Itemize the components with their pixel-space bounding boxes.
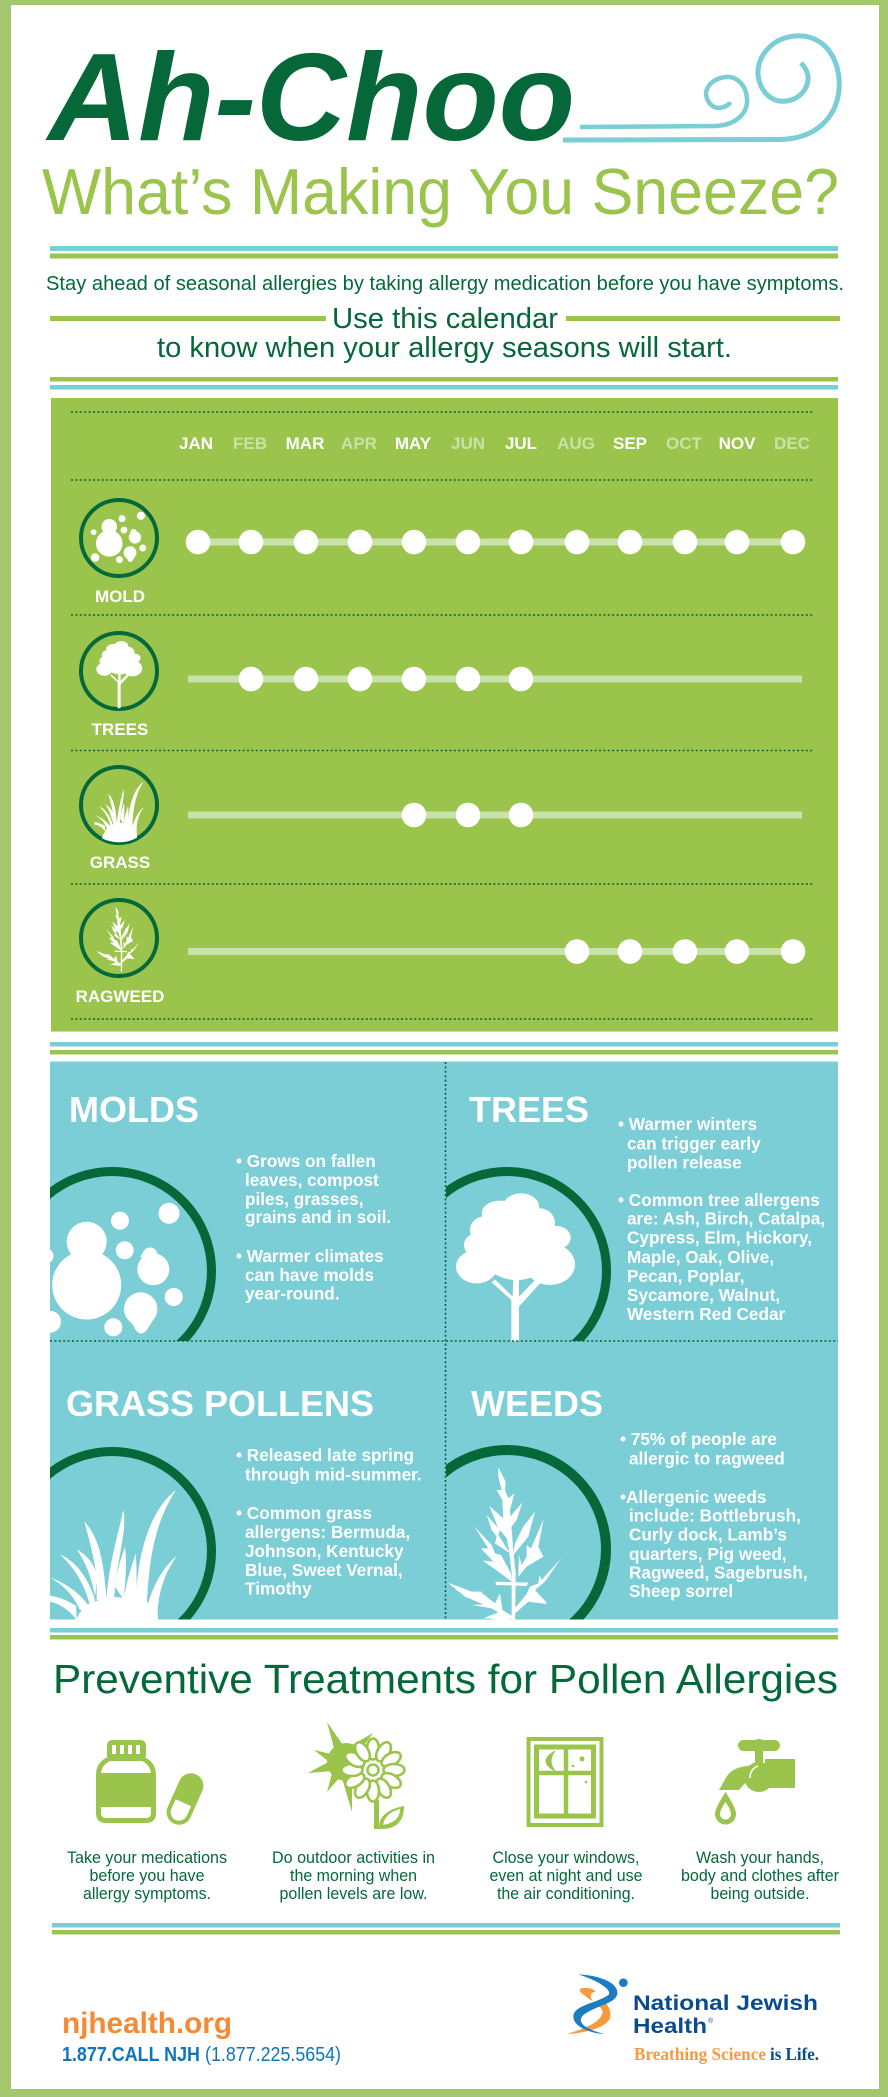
section: grass pollens — [50, 1390, 420, 1620]
section: weeds: Sheep sorrel — [629, 1581, 733, 1601]
calendar month headers: OCT — [666, 434, 703, 453]
treatment: close windows: the air conditioning. — [497, 1885, 635, 1903]
row: ragweed: RAGWEED — [76, 987, 164, 1006]
section: trees: can trigger early — [627, 1134, 761, 1154]
section: trees: are: Ash, Birch, Catalpa, — [627, 1208, 825, 1228]
section: molds: • Grows on fallen — [236, 1151, 376, 1171]
row: mold — [81, 500, 805, 606]
title: Ah-Choo: Ah-Choo — [45, 29, 575, 167]
section: grass pollens: Johnson, Kentucky — [245, 1541, 404, 1561]
footer contact: (1.877.225.5654) — [205, 2044, 341, 2066]
section: trees: pollen release — [627, 1152, 742, 1172]
panel: allergen details — [12, 1062, 838, 1653]
calendar month headers: DEC — [774, 434, 810, 453]
logo: National Jewish Health: Breathing Science — [634, 2044, 766, 2064]
logo: National Jewish Health: ® — [708, 2017, 714, 2025]
section: trees: Sycamore, Walnut, — [627, 1285, 780, 1305]
divider rules below calendar — [50, 1042, 838, 1054]
section: trees: • Common tree allergens — [618, 1190, 820, 1210]
treatment: medications: before you have — [90, 1867, 204, 1885]
treatment: wash hands — [681, 1739, 839, 1903]
section: grass pollens: • Common grass — [236, 1503, 372, 1523]
logo: National Jewish Health: Health — [633, 2015, 707, 2038]
section: molds: can have molds — [245, 1265, 374, 1285]
row: trees — [81, 633, 802, 739]
section: molds: year-round. — [245, 1284, 340, 1304]
icon: sneeze wind swirl — [563, 36, 839, 140]
calendar month headers: APR — [341, 434, 377, 453]
divider rules above calendar — [50, 377, 838, 390]
treatment: outdoor activities: pollen levels are low. — [280, 1885, 428, 1903]
calendar month headers: FEB — [233, 434, 267, 453]
icon: pill bottle and capsule — [96, 1740, 207, 1829]
treatment: medications — [67, 1740, 227, 1903]
treatment: medications: Take your medications — [67, 1849, 227, 1867]
section: grass pollens: GRASS POLLENS — [66, 1383, 374, 1424]
section: weeds: WEEDS — [471, 1383, 603, 1424]
treatment: wash hands: Wash your hands, — [696, 1849, 824, 1867]
calendar instruction: Use this calendar — [332, 303, 559, 335]
row: trees: TREES — [92, 720, 148, 739]
divider rules above footer — [52, 1923, 840, 1934]
footer contact: 1.877.CALL NJH — [62, 2044, 200, 2066]
treatment: wash hands: body and clothes after — [681, 1867, 839, 1885]
section: molds: leaves, compost — [245, 1170, 379, 1190]
section: weeds: Curly dock, Lamb’s — [629, 1524, 787, 1544]
section: trees: • Warmer winters — [618, 1114, 757, 1134]
calendar month headers: NOV — [719, 434, 756, 453]
section: weeds: Ragweed, Sagebrush, — [629, 1562, 808, 1582]
icon: sun and flower — [308, 1722, 404, 1829]
section: weeds: include: Bottlebrush, — [629, 1506, 801, 1526]
divider rules below details — [50, 1628, 838, 1640]
section: molds: MOLDS — [69, 1089, 199, 1130]
section: weeds: allergic to ragweed — [629, 1448, 785, 1468]
logo: National Jewish Health — [567, 1974, 819, 2064]
treatment: close windows — [490, 1739, 642, 1903]
footer contact — [62, 2007, 341, 2066]
section: weeds: • 75% of people are — [620, 1429, 777, 1449]
section: trees: TREES — [469, 1089, 589, 1130]
icon: DNA figure — [567, 1974, 628, 2034]
section: molds — [50, 1096, 390, 1341]
calendar month headers: JUL — [505, 434, 537, 453]
calendar month headers: JAN — [179, 434, 213, 453]
section: molds: grains and in soil. — [245, 1207, 391, 1227]
section: trees: Pecan, Poplar, — [627, 1266, 745, 1286]
treatment: outdoor activities — [272, 1722, 435, 1903]
icon: faucet and drop — [715, 1739, 795, 1824]
section: grass pollens: allergens: Bermuda, — [245, 1522, 410, 1542]
treatment: wash hands: being outside. — [710, 1885, 810, 1903]
section: molds: • Warmer climates — [236, 1246, 384, 1266]
calendar instruction: to know when your allergy seasons will start. — [157, 332, 732, 364]
calendar month headers: MAY — [395, 434, 432, 453]
row: mold: MOLD — [95, 587, 145, 606]
subtitle: What’s Making You Sneeze? — [42, 155, 839, 228]
section: trees: Western Red Cedar — [627, 1304, 786, 1324]
section: trees — [446, 1096, 824, 1341]
treatment: close windows: even at night and use — [490, 1867, 642, 1885]
row: grass: GRASS — [90, 853, 150, 872]
section: grass pollens: • Released late spring — [236, 1445, 414, 1465]
calendar month headers: AUG — [557, 434, 595, 453]
calendar month headers: MAR — [286, 434, 324, 453]
section: grass pollens: through mid-summer. — [245, 1464, 422, 1484]
logo: National Jewish Health: is Life. — [770, 2044, 819, 2064]
row: ragweed — [76, 900, 805, 1006]
treatment: medications: allergy symptoms. — [83, 1885, 211, 1903]
calendar month headers: JUN — [451, 434, 485, 453]
footer contact: njhealth.org — [62, 2007, 232, 2040]
treatment: outdoor activities: the morning when — [290, 1867, 417, 1885]
logo: National Jewish Health: National Jewish — [633, 1992, 818, 2015]
treatment: outdoor activities: Do outdoor activities in — [272, 1849, 435, 1867]
section: weeds: •Allergenic weeds — [620, 1487, 766, 1507]
calendar month headers — [179, 434, 810, 453]
icon: window at night — [528, 1739, 602, 1825]
intro text: Stay ahead of seasonal allergies by taking allergy medication before you have symptoms. — [46, 272, 844, 295]
section: weeds — [446, 1390, 806, 1620]
calendar instruction — [50, 303, 840, 364]
section: grass pollens: Timothy — [245, 1578, 312, 1598]
section: trees: Maple, Oak, Olive, — [627, 1247, 774, 1267]
section: trees: Cypress, Elm, Hickory, — [627, 1228, 812, 1248]
panel: allergy calendar — [51, 398, 838, 1032]
section: molds: piles, grasses, — [245, 1189, 363, 1209]
heading: preventive treatments: Preventive Treatments for Pollen Allergies — [53, 1656, 838, 1702]
calendar month headers: SEP — [613, 434, 647, 453]
section: weeds: quarters, Pig weed, — [629, 1544, 787, 1564]
treatment: close windows: Close your windows, — [492, 1849, 640, 1867]
divider rules top — [50, 246, 838, 258]
row: grass — [81, 767, 802, 872]
section: grass pollens: Blue, Sweet Vernal, — [245, 1560, 403, 1580]
